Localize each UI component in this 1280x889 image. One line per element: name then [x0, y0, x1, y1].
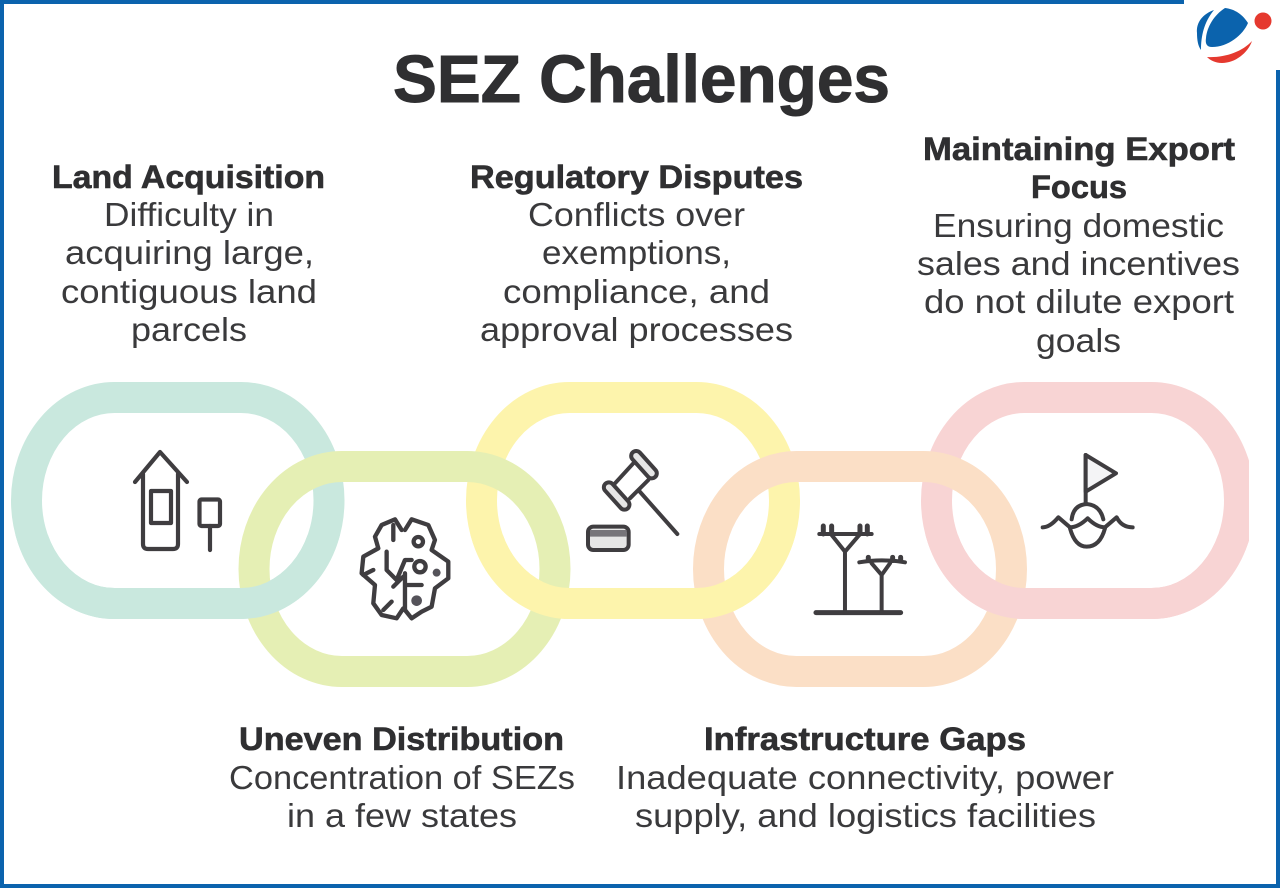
text block: uneven distribution: in a few states [287, 797, 517, 834]
text block: regulatory disputes: compliance, and [503, 273, 770, 310]
text block: land acquisition: Difficulty in [104, 196, 274, 233]
text block: regulatory disputes: approval processes [480, 311, 793, 348]
text block: land acquisition: parcels [131, 311, 247, 348]
chain of linked rings [26, 398, 1240, 672]
icon: gavel [588, 449, 677, 550]
text block: land acquisition: contiguous land [61, 273, 317, 310]
icon: brain [362, 519, 448, 618]
text block: infrastructure gaps: supply, and logistics facilities [635, 797, 1096, 834]
icon: logo [1197, 8, 1272, 63]
text block: maintaining export focus: do not dilute export [924, 283, 1234, 320]
text block: infrastructure gaps: Infrastructure Gaps [704, 721, 1026, 757]
text block: maintaining export focus: Ensuring domestic [933, 207, 1224, 244]
text block: maintaining export focus: goals [1036, 322, 1121, 359]
text block: maintaining export focus: sales and incentives [917, 245, 1240, 282]
text block: regulatory disputes [470, 159, 803, 348]
title: SEZ Challenges [393, 42, 890, 117]
icon: power pylons [816, 526, 905, 613]
text block: regulatory disputes: Conflicts over [528, 196, 745, 233]
icon: house and sign [135, 452, 220, 550]
text block: uneven distribution [229, 721, 575, 834]
text block: maintaining export focus [917, 131, 1240, 359]
text block: regulatory disputes: exemptions, [542, 234, 731, 271]
icon: flag over waves [1043, 455, 1133, 547]
text block: land acquisition: acquiring large, [65, 234, 314, 271]
text block: uneven distribution: Uneven Distribution [239, 721, 564, 757]
text block: land acquisition: Land Acquisition [52, 159, 325, 195]
text block: uneven distribution: Concentration of SEZs [229, 759, 575, 796]
text block: infrastructure gaps [616, 721, 1114, 834]
text block: land acquisition [52, 159, 325, 348]
text block: infrastructure gaps: Inadequate connectivity, power [616, 759, 1114, 796]
text block: maintaining export focus: Maintaining Export [923, 131, 1235, 167]
text block: maintaining export focus: Focus [1031, 169, 1127, 205]
text block: regulatory disputes: Regulatory Disputes [470, 159, 803, 195]
